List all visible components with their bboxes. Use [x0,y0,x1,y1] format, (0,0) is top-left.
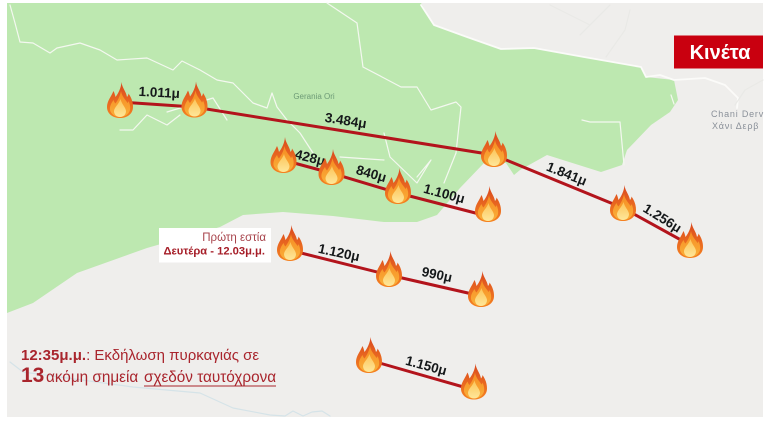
distance labels: 840μ [354,162,388,185]
place tag: Kineta: Κινέτα [690,42,751,64]
distance lines [120,102,690,390]
place label: Chani Derveni: Chani Derv [711,109,764,119]
distance labels: 1.011μ [138,84,180,101]
note: 13 more fire points [21,347,276,387]
callout: first fire: Δευτέρα - 12.03μ.μ. [163,246,265,258]
distance labels: 1.841μ [544,159,589,189]
note: 13 more fire points: 12:35μ.μ.: Εκδήλωση πυρκαγιάς σε [21,347,259,364]
place label: Gerania Ori: Gerania Ori [293,92,335,101]
callout: first fire: Πρώτη εστία [202,232,266,244]
place label: Chani Derveni: Χάνι Δερβ [712,121,759,131]
note: 13 more fire points: ακόμη σημεία [46,369,138,386]
distance labels: 990μ [420,264,454,285]
forest area [7,3,678,313]
distance labels: 1.100μ [422,181,466,206]
fire icons [107,82,703,400]
note: 13 more fire points: 13 [21,364,44,387]
distance labels [138,84,684,378]
place tag: Kineta [674,36,763,68]
distance labels: 1.256μ [641,201,684,236]
callout: first fire [159,228,271,262]
distance labels: 1.150μ [404,353,448,378]
distance labels: 1.120μ [317,241,361,264]
distance labels: 428μ [293,147,327,169]
note: 13 more fire points: σχεδόν ταυτόχρονα [144,369,276,386]
distance labels: 3.484μ [324,110,368,131]
place label: Chani Derveni [711,109,764,131]
